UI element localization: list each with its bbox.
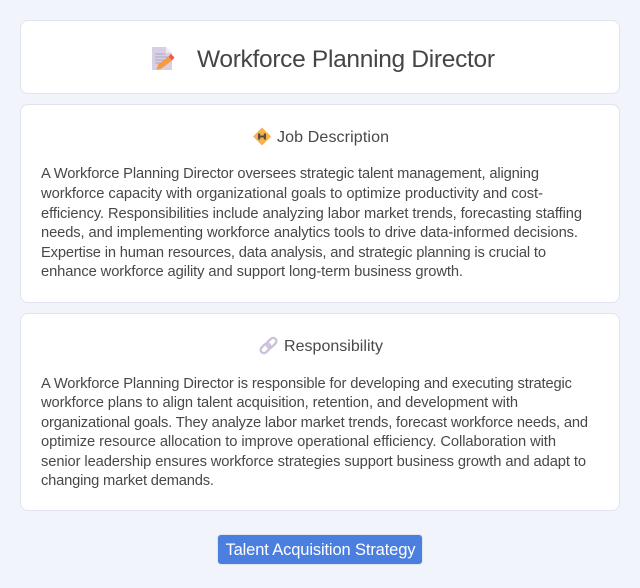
panel: header bbox=[20, 20, 620, 94]
title: Workforce Planning Director bbox=[197, 46, 495, 73]
button: talent acquisition strategy bbox=[217, 534, 423, 565]
text block: job description: Expertise in human resources, data analysis, and strategic planning is crucial to bbox=[41, 245, 546, 261]
text block: responsibility: A Workforce Planning Director is responsible for developing and executing strategic bbox=[41, 376, 572, 392]
text block: responsibility: optimize resource allocation to improve operational efficiency. Collaboration with bbox=[41, 434, 556, 450]
icon: document with pencil bbox=[152, 47, 174, 70]
text block: responsibility: organizational goals. They analyze labor market trends, forecast workforce needs, and bbox=[41, 415, 588, 431]
panel: job description bbox=[20, 104, 620, 303]
text block: job description: efficiency. Responsibilities include analyzing labor market trends, forecasting staffing bbox=[41, 206, 582, 222]
text block: responsibility: changing market demands. bbox=[41, 473, 214, 489]
text block: job description: A Workforce Planning Director oversees strategic talent management, aligning bbox=[41, 166, 539, 182]
button: talent acquisition strategy: Talent Acquisition Strategy bbox=[226, 541, 416, 559]
heading: job description: Job Description bbox=[277, 129, 389, 146]
text block: job description: needs, and implementing workforce analytics tools to drive data-informed decisions. bbox=[41, 225, 578, 241]
text block: job description bbox=[40, 166, 582, 280]
panel: responsibility bbox=[20, 313, 620, 511]
text block: responsibility: senior leadership ensures workforce strategies support business growth and adapt to bbox=[41, 454, 586, 470]
text block: responsibility: workforce plans to align talent acquisition, retention, and development with bbox=[40, 395, 518, 411]
text block: job description: workforce capacity with organizational goals to optimize productivity and cost- bbox=[40, 186, 543, 202]
text block: job description: enhance workforce agility and support long-term business growth. bbox=[41, 264, 463, 280]
heading: responsibility: Responsibility bbox=[284, 338, 383, 355]
